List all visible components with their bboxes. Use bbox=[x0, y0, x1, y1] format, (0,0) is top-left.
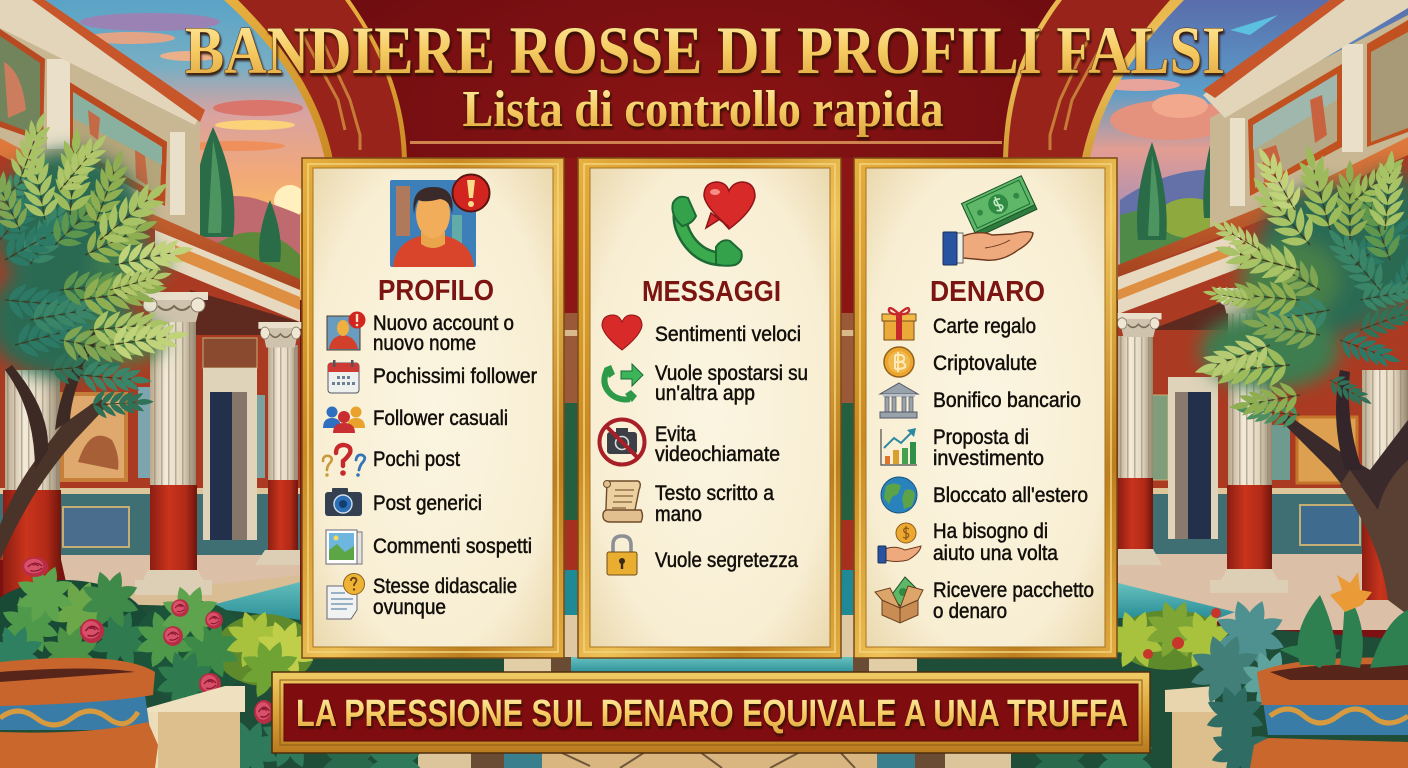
right pedestal and blue-green plant bbox=[1165, 598, 1301, 768]
item: evita videochiamate bbox=[600, 420, 780, 466]
cypress trees bbox=[194, 122, 1232, 262]
right terracotta pot and plant bbox=[1250, 572, 1408, 768]
item: spostarsi su altra app bbox=[604, 362, 808, 405]
item: bloccato all'estero: Bloccato all'estero bbox=[933, 484, 1088, 507]
item: pochissimi follower bbox=[328, 360, 537, 393]
item: spostarsi su altra app: Vuole spostarsi su bbox=[655, 362, 808, 385]
item: evita videochiamate: Evita bbox=[655, 423, 696, 446]
left columns bbox=[3, 292, 303, 595]
item: evita videochiamate: videochiamate bbox=[655, 443, 780, 466]
left terracotta pot bbox=[0, 658, 158, 768]
item: vuole segretezza: Vuole segretezza bbox=[655, 549, 798, 572]
arch inner red field bbox=[350, 0, 1056, 330]
left portico with wall, door and fresco bbox=[0, 138, 300, 660]
icon: phone and heart bubble bbox=[672, 182, 755, 266]
item: pochi post bbox=[323, 445, 460, 477]
rose bushes left bbox=[0, 557, 426, 768]
item: criptovalute: Criptovalute bbox=[933, 352, 1037, 375]
item: ricevere pacchetto: Ricevere pacchetto bbox=[933, 579, 1094, 602]
item: proposta di investimento: Proposta di bbox=[933, 426, 1029, 449]
item: pochissimi follower: Pochissimi follower bbox=[373, 365, 537, 388]
item: stesse didascalie: Stesse didascalie bbox=[373, 575, 517, 598]
item: ha bisogno di aiuto bbox=[878, 520, 1058, 565]
item: sentimenti veloci bbox=[602, 315, 801, 350]
left tree bbox=[0, 106, 197, 560]
item: post generici bbox=[325, 488, 482, 516]
item: sentimenti veloci: Sentimenti veloci bbox=[655, 323, 801, 346]
item: testo scritto a mano: mano bbox=[655, 503, 702, 526]
heading: MESSAGGI bbox=[642, 276, 781, 308]
right portico with wall, door and fresco bbox=[1118, 137, 1408, 630]
divider line under subtitle bbox=[410, 141, 1002, 144]
item: stesse didascalie bbox=[327, 574, 517, 619]
item: bonifico bancario: Bonifico bancario bbox=[933, 389, 1081, 412]
sky at sunset bbox=[0, 0, 1408, 300]
item: pochi post: Pochi post bbox=[373, 448, 460, 471]
item: criptovalute bbox=[884, 347, 1037, 377]
sun and hills bbox=[183, 169, 1230, 285]
right tree bbox=[1188, 139, 1408, 615]
item: stesse didascalie: ovunque bbox=[373, 596, 446, 619]
stone path and central pool bbox=[418, 657, 1011, 768]
heading: DENARO bbox=[930, 276, 1045, 308]
subtitle: Lista di controllo rapida bbox=[462, 81, 944, 138]
item: testo scritto a mano bbox=[603, 480, 774, 526]
panel: profilo bbox=[302, 158, 564, 658]
dark hedges bbox=[0, 604, 504, 768]
item: nuovo account: nuovo nome bbox=[373, 332, 476, 355]
item: nuovo account: Nuovo account o bbox=[373, 312, 514, 335]
item: nuovo account bbox=[327, 312, 514, 355]
panel: denaro bbox=[854, 158, 1117, 658]
item: vuole segretezza bbox=[607, 536, 798, 575]
item: commenti sospetti bbox=[326, 530, 532, 564]
banner text: LA PRESSIONE SUL DENARO EQUIVALE A UNA TRUFFA bbox=[296, 693, 1128, 735]
item: bloccato all'estero bbox=[881, 477, 1088, 513]
item: follower casuali: Follower casuali bbox=[373, 407, 508, 430]
item: carte regalo: Carte regalo bbox=[933, 315, 1036, 338]
item: proposta di investimento bbox=[881, 426, 1044, 470]
item: bonifico bancario bbox=[880, 383, 1081, 418]
central red arch bbox=[224, 0, 1184, 330]
right upper building with frescoes bbox=[1203, 0, 1408, 290]
item: ricevere pacchetto bbox=[875, 577, 1094, 623]
item: commenti sospetti: Commenti sospetti bbox=[373, 535, 532, 558]
left upper building with frescoes bbox=[0, 0, 205, 290]
item: spostarsi su altra app: un'altra app bbox=[655, 382, 755, 405]
right columns bbox=[1115, 288, 1408, 600]
item: carte regalo bbox=[882, 308, 1036, 340]
item: ha bisogno di aiuto: Ha bisogno di bbox=[933, 520, 1048, 543]
heading: PROFILO bbox=[378, 275, 494, 307]
arch inner gold edge bbox=[345, 0, 1062, 330]
item: post generici: Post generici bbox=[373, 492, 482, 515]
item: ricevere pacchetto: o denaro bbox=[933, 600, 1007, 623]
strips of scene visible between cards bbox=[560, 158, 859, 660]
arch outer gold edge and terracotta band bbox=[224, 0, 1184, 330]
icon: hand holding cash bbox=[943, 176, 1037, 265]
item: ha bisogno di aiuto: aiuto una volta bbox=[933, 542, 1058, 565]
title: BANDIERE ROSSE DI PROFILI FALSI bbox=[185, 12, 1225, 88]
flower bushes right bbox=[1030, 599, 1236, 768]
item: follower casuali bbox=[323, 406, 508, 433]
item: proposta di investimento: investimento bbox=[933, 447, 1044, 470]
banner: bottom warning bbox=[272, 672, 1150, 753]
left pedestal bbox=[147, 686, 245, 768]
icon: faceless profile with alert bbox=[390, 174, 490, 267]
item: testo scritto a mano: Testo scritto a bbox=[655, 482, 774, 505]
panel: messaggi bbox=[578, 158, 841, 658]
